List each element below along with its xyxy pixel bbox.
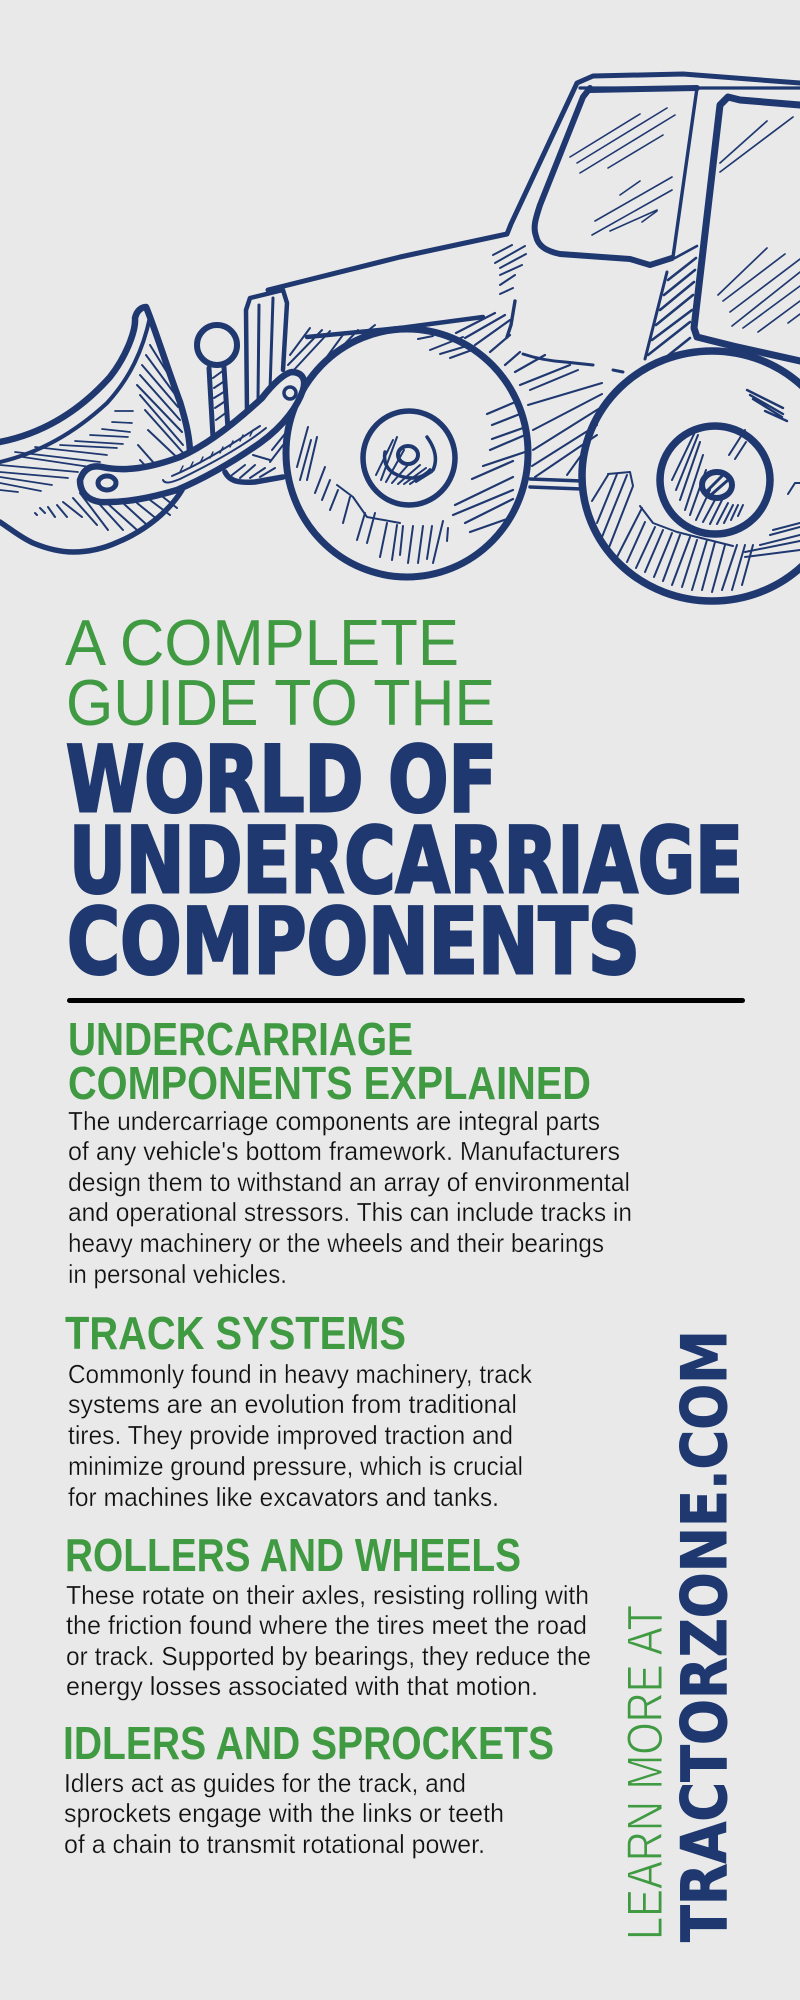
heading	[68, 1013, 591, 1109]
body text: for machines like excavators and tanks.	[68, 1482, 499, 1512]
body text: and operational stressors. This can include tracks in	[68, 1197, 632, 1227]
heading: IDLERS AND SPROCKETS	[63, 1717, 554, 1769]
body text: Idlers act as guides for the track, and	[64, 1768, 466, 1798]
body text: or track. Supported by bearings, they reduce the	[66, 1641, 591, 1671]
title	[65, 606, 743, 995]
website address: TRACTORZONE.COM	[668, 1330, 741, 1942]
body text: tires. They provide improved traction and	[68, 1420, 513, 1450]
section: rollers and wheels	[65, 1529, 591, 1701]
body text: The undercarriage components are integral parts	[68, 1106, 600, 1136]
body text: These rotate on their axles, resisting rolling with	[66, 1580, 589, 1610]
vertical call to action	[617, 1330, 741, 1942]
title: bold navy lines: COMPONENTS	[67, 890, 640, 995]
section: idlers and sprockets	[63, 1717, 554, 1859]
body text: minimize ground pressure, which is crucial	[68, 1451, 523, 1481]
body text	[68, 1359, 533, 1512]
body text: energy losses associated with that motion.	[66, 1671, 538, 1701]
section: track systems	[65, 1307, 533, 1512]
title: bold navy lines: WORLD OF	[66, 728, 497, 833]
divider rule	[67, 998, 745, 1003]
illustration: tractor with front loader bucket	[0, 74, 800, 601]
front wheel	[286, 329, 528, 577]
body text: Commonly found in heavy machinery, track	[68, 1359, 533, 1389]
heading: UNDERCARRIAGE	[68, 1013, 413, 1065]
body text: in personal vehicles.	[68, 1259, 287, 1289]
title: light green lines	[65, 606, 495, 739]
heading: TRACK SYSTEMS	[65, 1307, 406, 1359]
body text: of a chain to transmit rotational power.	[64, 1829, 485, 1859]
body text: sprockets engage with the links or teeth	[64, 1798, 504, 1828]
learn more label: LEARN MORE AT	[617, 1605, 673, 1940]
heading: ROLLERS AND WHEELS	[65, 1529, 521, 1581]
body text: of any vehicle's bottom framework. Manufacturers	[68, 1136, 620, 1166]
body text: heavy machinery or the wheels and their bearings	[68, 1228, 604, 1258]
title: light green lines: GUIDE TO THE	[66, 666, 495, 739]
body text	[66, 1580, 591, 1701]
body text: the friction found where the tires meet the road	[66, 1610, 587, 1640]
title: bold navy lines	[66, 728, 743, 995]
body text: design them to withstand an array of environmental	[68, 1167, 630, 1197]
loader arm	[80, 372, 304, 502]
heading: COMPONENTS EXPLAINED	[68, 1057, 591, 1109]
ball lever and plate	[197, 290, 287, 482]
title: light green lines: A COMPLETE	[65, 606, 459, 679]
bucket	[0, 307, 190, 552]
section: undercarriage components explained	[68, 1013, 632, 1289]
hatching: shading strokes on tractor	[0, 108, 800, 592]
body text	[68, 1106, 632, 1289]
body text: systems are an evolution from traditional	[68, 1389, 517, 1419]
cab and body outline	[268, 74, 800, 489]
body text	[64, 1768, 504, 1859]
rear wheel	[582, 351, 800, 601]
